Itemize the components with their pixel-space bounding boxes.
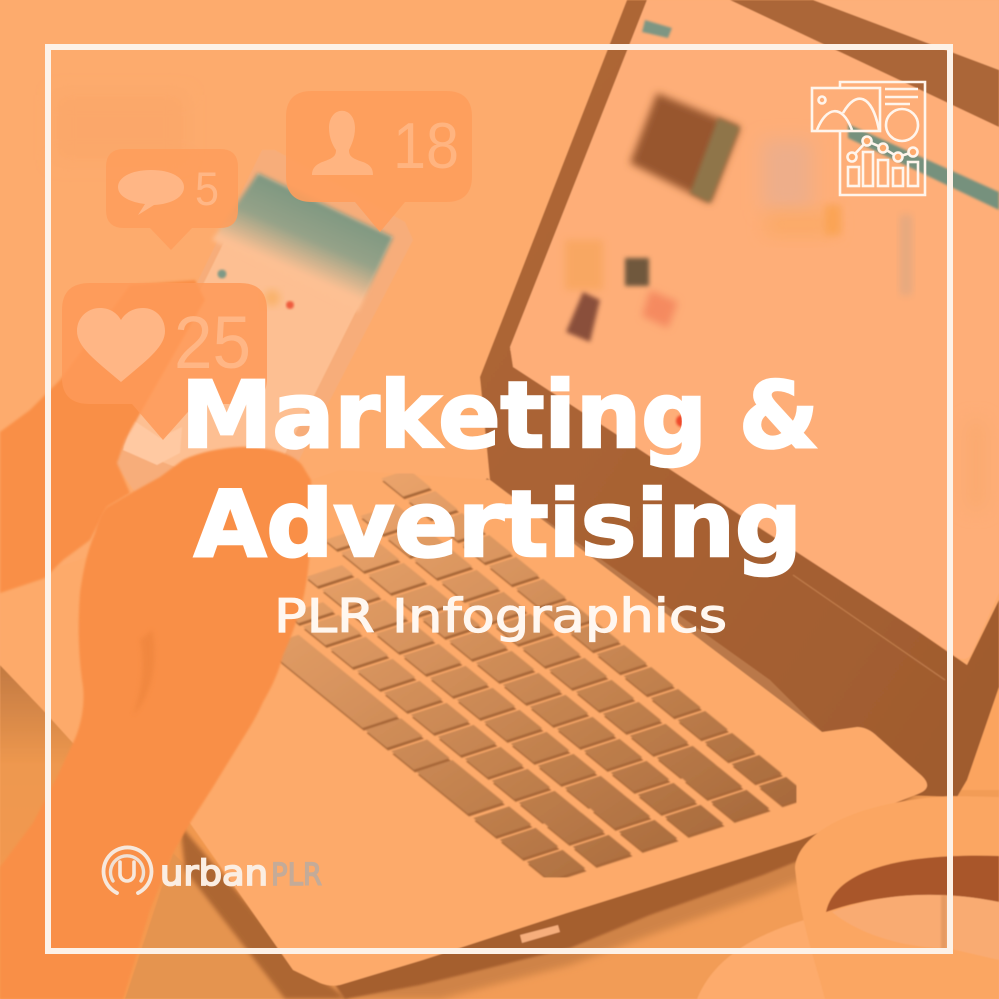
right hand tapping phone [0, 447, 312, 999]
logo wordmark [160, 854, 322, 894]
laptop lid [480, 0, 999, 797]
keyboard [280, 474, 797, 878]
wood under laptop [300, 790, 999, 999]
urbanPLR logo [104, 847, 322, 894]
count 5: 5 [195, 162, 219, 215]
saucer [697, 920, 825, 999]
wall behind laptop [813, 0, 999, 70]
icon: person [312, 111, 373, 175]
notification bubble: likes 25 [62, 283, 267, 440]
laptop deck [234, 479, 928, 986]
phone [114, 150, 413, 512]
logo wordmark: urban [160, 854, 268, 894]
wood wedge beside wrist [126, 854, 286, 999]
logo wordmark: PLR [271, 858, 322, 893]
light desk right of laptop lid [962, 690, 999, 790]
desk wood left [0, 665, 242, 999]
count 18: 18 [393, 109, 459, 182]
laptop hinge [480, 478, 822, 732]
coffee cup [795, 796, 999, 999]
wood shadow under deck [337, 785, 930, 999]
notification bubble: comments 5 [106, 149, 238, 250]
title [181, 362, 819, 578]
left hand holding phone [0, 280, 205, 593]
title: Advertising [194, 471, 802, 578]
laptop screen [510, 0, 999, 659]
icon: heart [77, 308, 165, 382]
wood shadow along laptop edge [180, 825, 350, 999]
laptop port [520, 925, 560, 943]
icon: report with image, chart and bars [812, 82, 925, 195]
subtitle: PLR Infographics [274, 589, 727, 643]
lid edge highlight [793, 575, 945, 680]
icon: speech balloon [118, 170, 184, 215]
hand tendon shading [133, 630, 155, 715]
title: Marketing & [181, 362, 819, 469]
logo mark [104, 847, 152, 893]
notification bubble: followers 18 [286, 91, 472, 232]
count 25: 25 [174, 301, 251, 384]
